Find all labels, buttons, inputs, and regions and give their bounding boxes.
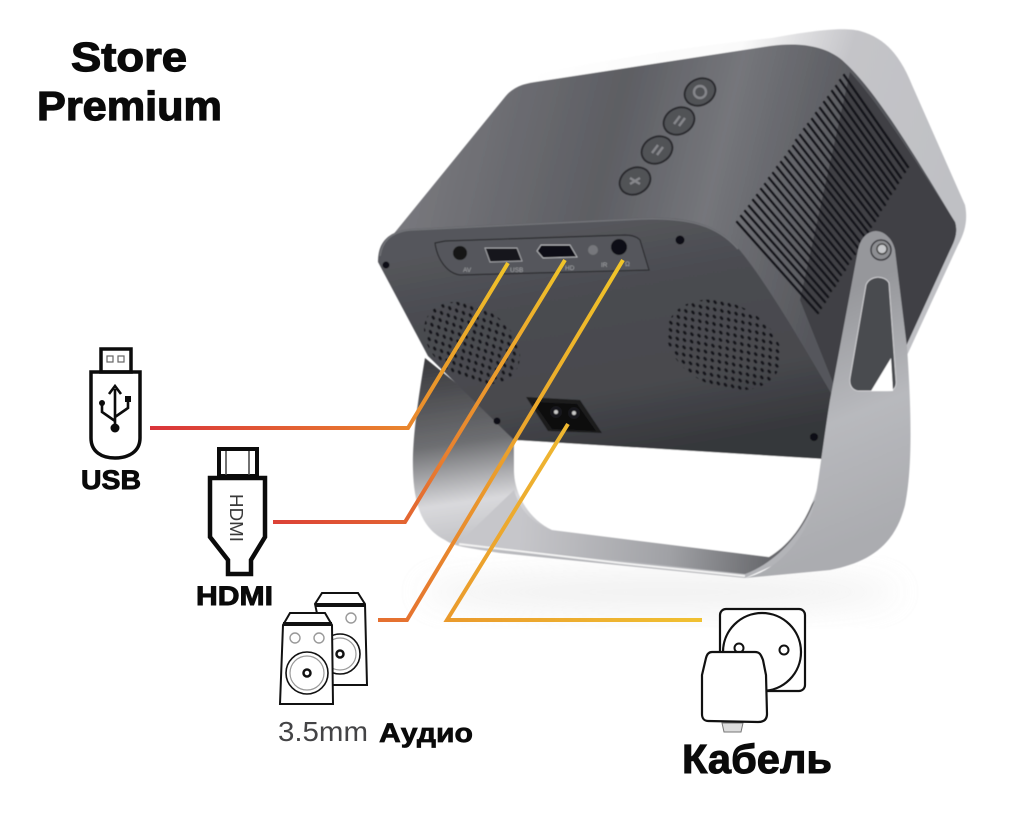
label: USB: USB xyxy=(81,465,141,495)
button symbols xyxy=(630,86,706,184)
stand opening xyxy=(514,437,822,557)
USB line xyxy=(150,263,508,428)
port labels: Ω xyxy=(625,261,630,268)
gap behind arm xyxy=(871,358,893,391)
port labels: HD xyxy=(565,265,575,272)
stand bottom band xyxy=(459,490,815,574)
port labels: USB xyxy=(510,267,523,274)
port labels: IR xyxy=(601,262,608,269)
label: Кабель: Кабель xyxy=(682,736,832,782)
front face highlight xyxy=(380,219,738,256)
stand bolt xyxy=(871,240,891,260)
icon: socket and plug xyxy=(702,609,805,732)
label: Аудио: Аудио xyxy=(379,718,473,748)
control buttons xyxy=(615,73,720,200)
projector photo xyxy=(378,29,966,610)
port strip xyxy=(435,235,649,275)
rear rim xyxy=(517,29,966,392)
stand right arm xyxy=(745,231,911,578)
USB port xyxy=(485,248,522,262)
title xyxy=(37,34,222,129)
front face xyxy=(378,218,835,459)
HDMI port xyxy=(537,245,577,258)
title: Store xyxy=(71,34,187,80)
body shell xyxy=(392,45,956,440)
connection lines xyxy=(150,260,702,620)
indicator light xyxy=(588,245,598,255)
label: HDMI: HDMI xyxy=(196,581,273,611)
port labels xyxy=(463,261,630,274)
stand rear and left arm xyxy=(413,358,830,578)
speaker grill left xyxy=(409,285,535,401)
label: 3.5mm: 3.5mm xyxy=(278,716,368,747)
HDMI line xyxy=(273,260,565,522)
port labels: AV xyxy=(463,267,472,274)
speaker grill right xyxy=(652,282,796,408)
icon: USB drive xyxy=(91,349,140,458)
power line xyxy=(447,424,702,620)
ventilation slats xyxy=(737,75,908,313)
audio port xyxy=(611,239,627,255)
screws xyxy=(382,236,818,441)
stand arm opening xyxy=(850,277,896,391)
dark side face xyxy=(800,72,956,400)
AV port xyxy=(453,246,467,260)
icon: HDMI plug: HDMI xyxy=(226,494,246,542)
icon: speakers xyxy=(280,593,367,704)
title: Premium xyxy=(37,83,222,129)
ground shadow xyxy=(420,574,900,610)
stand lower edge xyxy=(459,544,745,576)
audio line xyxy=(378,260,623,620)
power socket xyxy=(526,397,602,433)
icon: HDMI plug xyxy=(210,449,265,574)
